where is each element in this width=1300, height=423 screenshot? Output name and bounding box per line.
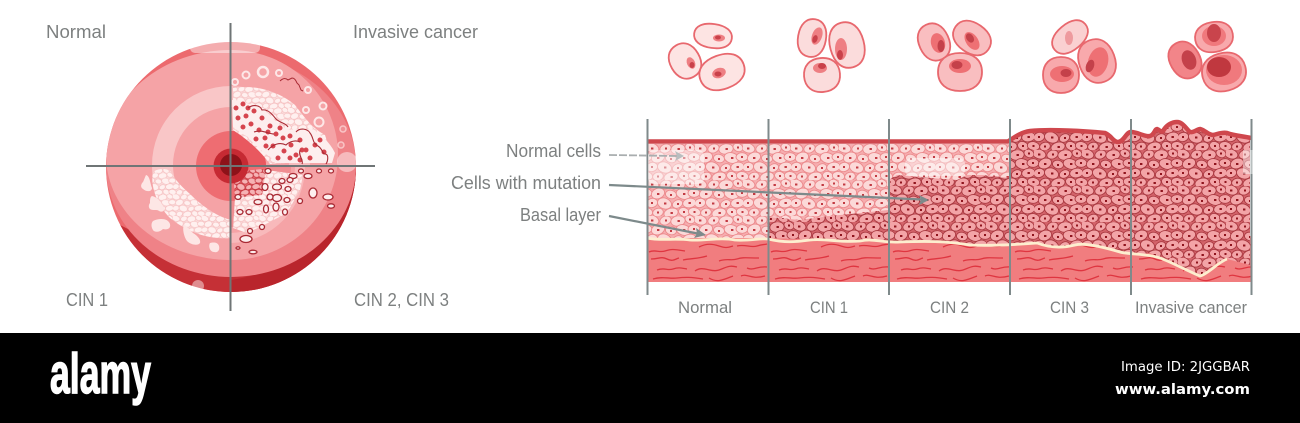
central os — [214, 148, 248, 184]
cells: CIN 3 — [1043, 14, 1121, 93]
cells: CIN 1 — [795, 17, 869, 94]
stage divider lines — [648, 119, 1252, 295]
callout: Basal layer — [520, 205, 706, 238]
stage label: Normal: Normal — [678, 299, 732, 317]
callout: Normal cells — [506, 141, 684, 161]
watermark fragments on tissue — [648, 150, 1253, 184]
footer url: www.alamy.com — [1115, 382, 1250, 398]
basal layer line — [647, 238, 1227, 276]
cells: Normal — [663, 21, 749, 96]
invasive cancer lesion — [232, 67, 346, 164]
panel: cell illustrations row — [663, 14, 1250, 96]
cervix disc body — [100, 40, 362, 295]
surface layer — [647, 122, 1251, 142]
label: CIN 1: CIN 1 — [66, 290, 108, 310]
stage label: CIN 2: CIN 2 — [930, 299, 969, 317]
footer band — [0, 333, 1300, 423]
normal epithelium — [647, 144, 1010, 246]
cells: Invasive cancer — [1163, 19, 1250, 96]
callout: Basal layer: Basal layer — [520, 205, 601, 225]
callout: Cells with mutation — [451, 173, 929, 205]
cells: CIN 2 — [912, 14, 997, 91]
panel: epithelium cross-section — [647, 119, 1253, 317]
crosshair lines — [86, 23, 375, 311]
callout: Normal cells: Normal cells — [506, 141, 601, 161]
stroma layer — [647, 236, 1251, 282]
footer image id: Image ID: 2JGGBAR — [1121, 359, 1250, 375]
watermark fragments on disc — [190, 40, 357, 292]
label: Invasive cancer: Invasive cancer — [353, 22, 478, 42]
CIN 2 and CIN 3 lesion — [233, 168, 334, 254]
label: Normal: Normal — [46, 22, 106, 42]
stage label: Invasive cancer: Invasive cancer — [1135, 299, 1247, 317]
central os ring — [196, 131, 266, 201]
panel: cervix quadrant diagram — [46, 22, 478, 311]
stage label: CIN 1: CIN 1 — [810, 299, 848, 317]
CIN 1 lesion — [141, 169, 231, 252]
footer logo: alamy — [50, 342, 151, 406]
label: CIN 2, CIN 3: CIN 2, CIN 3 — [354, 290, 449, 310]
callout: Cells with mutation: Cells with mutation — [451, 173, 601, 193]
stage label: CIN 3: CIN 3 — [1050, 299, 1089, 317]
callouts with arrows — [451, 141, 929, 238]
mutated epithelium — [768, 175, 1010, 246]
cancerous epithelium — [1010, 122, 1250, 276]
